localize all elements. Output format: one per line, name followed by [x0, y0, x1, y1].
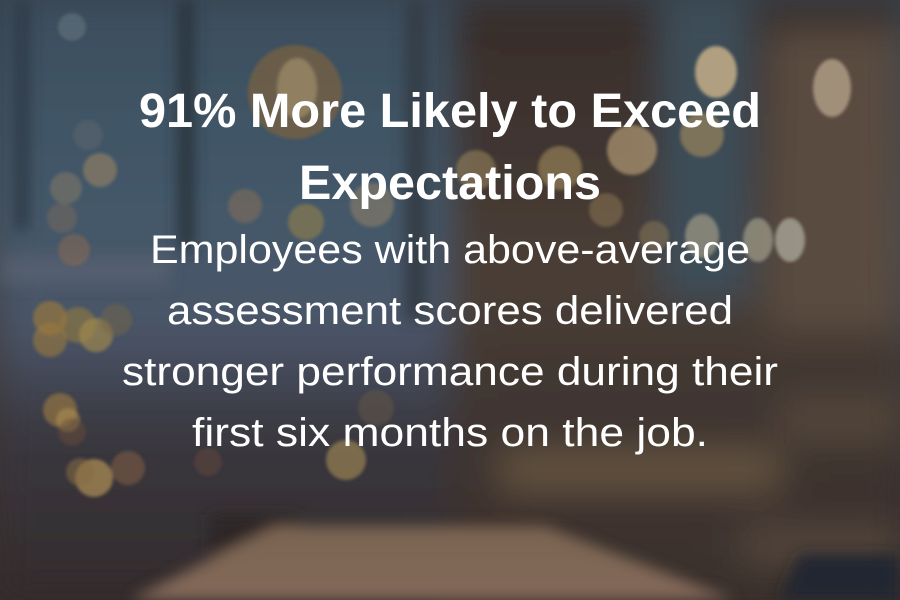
heading: 91% More Likely to Exceed	[139, 85, 761, 138]
description: Employees with above-average	[150, 228, 750, 272]
heading	[139, 85, 761, 210]
description: first six months on the job.	[192, 411, 708, 455]
bokeh lights	[33, 13, 851, 497]
description: assessment scores delivered	[167, 289, 733, 333]
description	[122, 228, 778, 455]
heading: Expectations	[299, 157, 601, 210]
description: stronger performance during their	[122, 350, 778, 394]
